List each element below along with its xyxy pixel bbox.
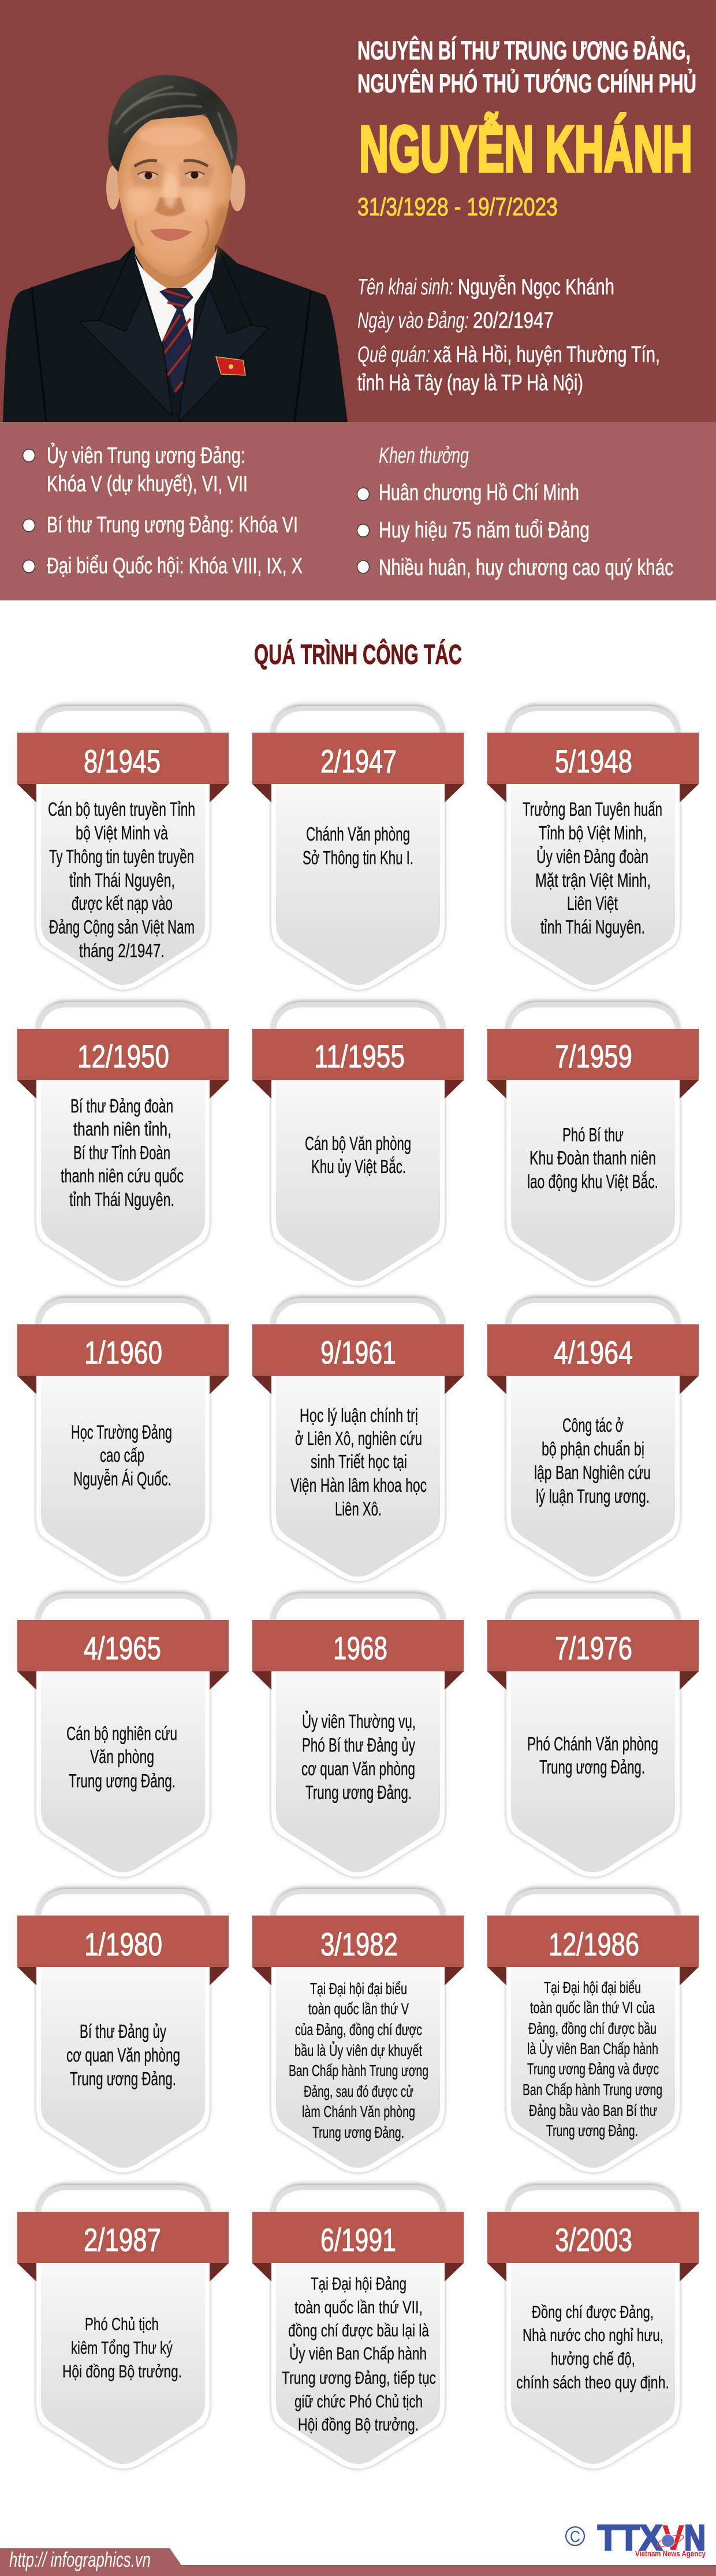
face shading <box>126 125 231 271</box>
card: 6/1991: toàn quốc lần thứ VII, <box>294 2297 423 2317</box>
card: 4/1964 <box>487 1296 699 1581</box>
life dates: 31/3/1928 - 19/7/2023 <box>357 193 558 221</box>
card: 3/2003: Đồng chí được Đảng, <box>532 2302 654 2322</box>
card: 5/1948: 5/1948 <box>555 743 632 779</box>
card: 1/1980: Trung ương Đảng. <box>70 2068 176 2089</box>
card: 1968: Phó Bí thư Đảng ủy <box>302 1734 415 1756</box>
card: 4/1965: Trung ương Đảng. <box>69 1770 176 1791</box>
card: 3/1982: 3/1982 <box>320 1926 398 1962</box>
left list <box>23 443 303 578</box>
card: 3/1982: Trung ương Đảng. <box>312 2123 404 2141</box>
card: 5/1948 <box>487 704 699 990</box>
card: 6/1991: 6/1991 <box>320 2222 396 2258</box>
logo: TTXVN <box>566 2518 706 2558</box>
card: 1968: Ủy viên Thường vụ, <box>302 1711 416 1732</box>
card: 7/1959: Phó Bí thư <box>562 1124 624 1145</box>
suit <box>3 245 348 422</box>
ears <box>106 166 120 210</box>
card: 3/1982: toàn quốc lần thứ V <box>308 2000 409 2018</box>
hair <box>108 75 237 174</box>
card: 12/1986: Trung ương Đảng và được <box>527 2060 659 2078</box>
card: 4/1965 <box>17 1592 229 1877</box>
card: 5/1948: Liên Việt <box>567 893 618 914</box>
card: 5/1948: tỉnh Thái Nguyên. <box>540 916 645 938</box>
card: 7/1959: 7/1959 <box>555 1038 632 1074</box>
card: 12/1950: thanh niên tỉnh, <box>73 1118 171 1140</box>
personal info: tỉnh Hà Tây (nay là TP Hà Nội) <box>357 371 583 395</box>
card: 2/1987 <box>17 2183 229 2469</box>
left list: Đại biểu Quốc hội: Khóa VIII, IX, X <box>47 554 303 578</box>
right list <box>357 443 673 580</box>
card: 7/1959: Khu Đoàn thanh niên <box>529 1147 656 1168</box>
personal info: 20/2/1947 <box>473 308 554 333</box>
card: 12/1950: thanh niên cứu quốc <box>61 1165 184 1186</box>
card: 12/1950 <box>17 1000 229 1286</box>
card: 1/1960: Học Trường Đảng <box>71 1421 172 1443</box>
right list: Huân chương Hồ Chí Minh <box>379 480 579 505</box>
card: 1/1980: Bí thư Đảng ủy <box>80 2021 166 2042</box>
card: 8/1945: Đảng Cộng sản Việt Nam <box>49 916 195 938</box>
card: 7/1976 <box>487 1592 699 1877</box>
left list: Khóa V (dự khuyết), VI, VII <box>47 472 248 496</box>
card: 2/1987: kiêm Tổng Thư ký <box>71 2338 173 2358</box>
card: 7/1976: Trung ương Đảng. <box>539 1756 645 1778</box>
personal info: Ngày vào Đảng: <box>357 308 469 333</box>
card: 8/1945 <box>17 704 229 990</box>
card: 2/1947 <box>252 704 464 990</box>
card: 7/1959 <box>487 1000 699 1286</box>
right list: Khen thưởng <box>379 443 469 468</box>
card: 1968: 1968 <box>333 1630 387 1666</box>
footer url: http:// infographics.vn <box>9 2548 151 2571</box>
card: 3/2003: chính sách theo quy định. <box>516 2372 669 2392</box>
tie <box>159 288 193 394</box>
card: 8/1945: Ty Thông tin tuyên truyền <box>49 846 194 867</box>
panel: positions and awards <box>0 422 716 600</box>
card: 9/1961: ở Liên Xô, nghiên cứu <box>295 1428 422 1449</box>
footer bar <box>0 2548 716 2576</box>
card: 12/1950: Bí thư Tỉnh Đoàn <box>73 1142 170 1163</box>
card: 12/1986 <box>487 1887 699 2172</box>
card: 1/1980: 1/1980 <box>84 1926 162 1962</box>
card: 8/1945: được kết nạp vào <box>72 893 173 914</box>
personal info: Nguyễn Ngọc Khánh <box>458 275 614 300</box>
personal info <box>357 275 660 395</box>
card: 6/1991: Trung ương Đảng, tiếp tục <box>282 2368 436 2388</box>
copyright mark <box>566 2527 584 2545</box>
left list: Bí thư Trung ương Đảng: Khóa VI <box>47 513 298 537</box>
card: 12/1950: 12/1950 <box>77 1038 169 1074</box>
card: 11/1955 <box>252 1000 464 1286</box>
card: 12/1986: là Ủy viên Ban Chấp hành <box>527 2039 658 2058</box>
card: 12/1986: Đảng, đồng chí được bầu <box>528 2019 657 2037</box>
card: 1968: Trung ương Đảng. <box>305 1782 412 1803</box>
card: 2/1947: Chánh Văn phòng <box>306 823 410 845</box>
card: 12/1986: Trung ương Đảng. <box>546 2122 638 2140</box>
card: 1/1980: cơ quan Văn phòng <box>66 2044 180 2066</box>
card: 9/1961: sinh Triết học tại <box>311 1451 407 1472</box>
card: 4/1965: Văn phòng <box>90 1746 154 1767</box>
left list: Ủy viên Trung ương Đảng: <box>47 443 245 468</box>
card: 8/1945: 8/1945 <box>84 743 161 779</box>
card: 2/1947: Sở Thông tin Khu I. <box>303 847 413 868</box>
portrait photo <box>3 75 348 422</box>
card: 1/1980 <box>17 1887 229 2172</box>
card: 12/1986: toàn quốc lần thứ VI của <box>530 1999 655 2017</box>
card: 1968 <box>252 1592 464 1877</box>
card: 1968: cơ quan Văn phòng <box>301 1758 415 1779</box>
card: 3/1982: làm Chánh Văn phòng <box>302 2103 415 2120</box>
card: 9/1961: Viện Hàn lâm khoa học <box>290 1474 427 1496</box>
card: 3/1982 <box>252 1887 464 2172</box>
card: 9/1961: Liên Xô. <box>335 1498 382 1520</box>
copyright mark: C <box>570 2528 580 2545</box>
card: 5/1948: Mặt trận Việt Minh, <box>535 869 651 891</box>
card: 3/1982: Đảng, sau đó được cử <box>304 2082 413 2100</box>
card: 12/1986: 12/1986 <box>549 1926 639 1962</box>
card: 2/1987: Hội đồng Bộ trưởng. <box>62 2361 182 2381</box>
card: 3/1982: bầu là Ủy viên dự khuyết <box>294 2041 422 2059</box>
card: 6/1991: Hội đồng Bộ trưởng. <box>298 2414 419 2435</box>
card: 12/1986: Tại Đại hội đại biểu <box>544 1978 641 1996</box>
card: 8/1945: tỉnh Thái Nguyên, <box>69 869 175 891</box>
globe <box>656 2533 685 2549</box>
card: 12/1950: Bí thư Đảng đoàn <box>70 1095 173 1117</box>
card: 4/1964: 4/1964 <box>554 1334 633 1371</box>
card: 4/1965: 4/1965 <box>84 1630 161 1666</box>
card: 2/1947: 2/1947 <box>320 743 397 779</box>
section heading: QUÁ TRÌNH CÔNG TÁC <box>254 639 462 670</box>
card: 9/1961: Học lý luận chính trị <box>300 1405 418 1426</box>
card: 4/1964: bộ phận chuẩn bị <box>542 1438 644 1459</box>
card: 3/1982: của Đảng, đồng chí được <box>295 2021 422 2039</box>
card: 9/1961: 9/1961 <box>320 1334 396 1371</box>
card: 11/1955: Khu ủy Việt Bắc. <box>311 1156 406 1177</box>
card: 2/1987: Phó Chủ tịch <box>85 2314 159 2334</box>
card: 6/1991: giữ chức Phó Chủ tịch <box>294 2391 423 2411</box>
card: 4/1964: lập Ban Nghiên cứu <box>534 1462 651 1483</box>
header background <box>0 0 716 422</box>
card: 7/1976: 7/1976 <box>555 1630 632 1666</box>
mouth <box>150 229 192 241</box>
right list: Huy hiệu 75 năm tuổi Đảng <box>379 518 590 543</box>
card: 1/1960 <box>17 1296 229 1581</box>
neck <box>134 231 215 296</box>
card: 5/1948: Tỉnh bộ Việt Minh, <box>539 822 647 843</box>
shirt <box>134 247 218 348</box>
card: 11/1955: 11/1955 <box>314 1038 405 1074</box>
card: 3/2003: 3/2003 <box>555 2222 632 2258</box>
card: 4/1964: lý luận Trung ương. <box>536 1485 650 1507</box>
card: 5/1948: Ủy viên Đảng đoàn <box>536 846 648 867</box>
card: 1/1960: 1/1960 <box>84 1334 162 1371</box>
logo: TTXVN: V <box>662 2518 684 2558</box>
card: 12/1986: Đảng bầu vào Ban Bí thư <box>529 2101 657 2119</box>
lapels <box>80 247 172 416</box>
card: 8/1945: tháng 2/1947. <box>79 940 165 961</box>
card: 9/1961 <box>252 1296 464 1581</box>
card: 8/1945: bộ Việt Minh và <box>76 822 168 843</box>
card: 7/1976: Phó Chánh Văn phòng <box>527 1733 658 1754</box>
card: 6/1991: đồng chí được bầu lại là <box>288 2320 430 2340</box>
card: 4/1965: Cán bộ nghiên cứu <box>66 1723 177 1744</box>
badge <box>216 357 245 375</box>
card: 8/1945: Cán bộ tuyên truyền Tỉnh <box>48 798 195 820</box>
title: positions <box>357 36 696 98</box>
sleeve seams <box>32 287 311 422</box>
personal info: Quê quán: <box>357 342 430 367</box>
card: 1/1960: cao cấp <box>100 1444 144 1466</box>
card: 3/1982: Ban Chấp hành Trung ương <box>289 2062 428 2080</box>
eyes <box>137 171 204 180</box>
card: 3/1982: Tại Đại hội đại biểu <box>310 1980 407 1998</box>
logo: TTXVN: N <box>684 2518 706 2558</box>
card: 1/1960: Nguyễn Ái Quốc. <box>73 1468 171 1489</box>
card: 6/1991 <box>252 2183 464 2469</box>
card: 11/1955: Cán bộ Văn phòng <box>305 1133 411 1154</box>
card: 12/1950: tỉnh Thái Nguyên. <box>69 1189 174 1210</box>
card: 3/2003 <box>487 2183 699 2469</box>
card: 3/2003: Nhà nước cho nghỉ hưu, <box>523 2325 663 2345</box>
face <box>117 108 232 277</box>
card: 3/2003: hưởng chế độ, <box>551 2349 635 2369</box>
card: 6/1991: Ủy viên Ban Chấp hành <box>289 2343 427 2364</box>
card: 6/1991: Tại Đại hội Đảng <box>311 2273 407 2294</box>
logo: TTXVN: TTX <box>598 2518 662 2558</box>
card: 7/1959: lao động khu Việt Bắc. <box>527 1171 658 1192</box>
personal info: Tên khai sinh: <box>357 275 453 300</box>
card: 4/1964: Công tác ở <box>562 1414 624 1436</box>
card: 2/1987: 2/1987 <box>84 2222 161 2258</box>
brows <box>135 160 208 166</box>
